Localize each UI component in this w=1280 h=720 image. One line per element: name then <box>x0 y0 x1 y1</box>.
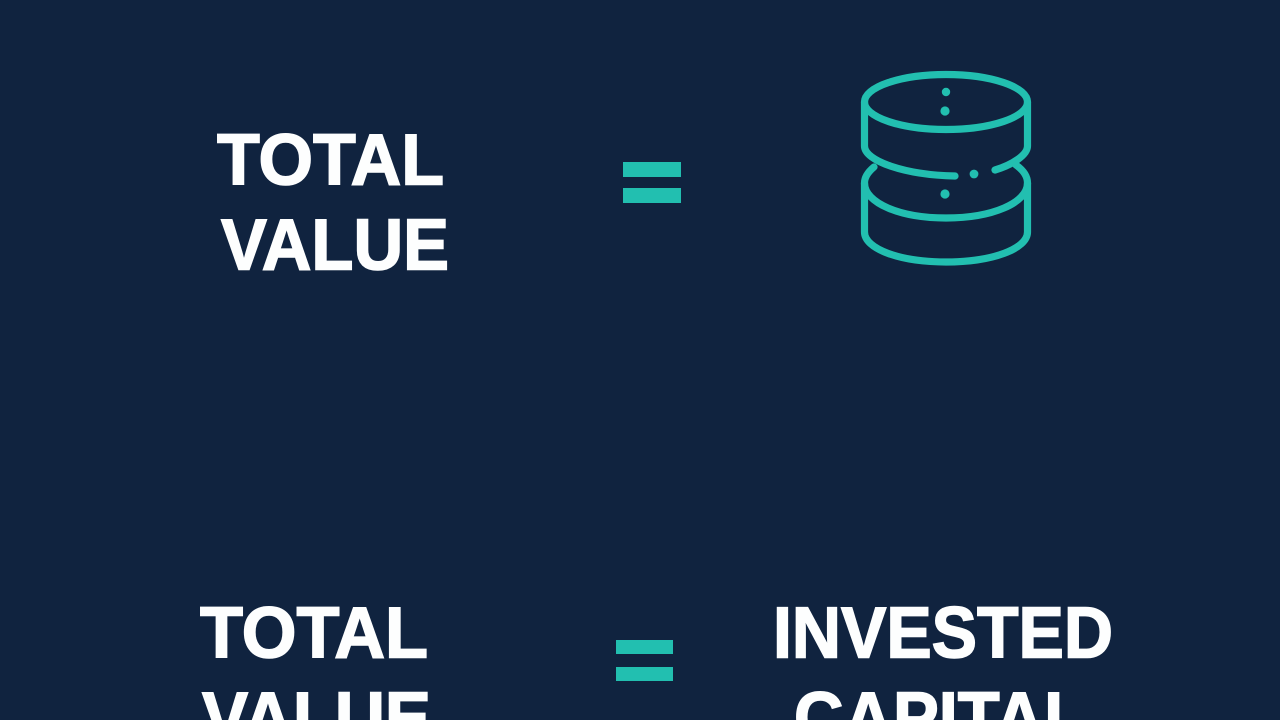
heading: total value (bottom): TOTAL <box>200 593 428 673</box>
heading: total value (bottom) <box>200 606 428 720</box>
infographic canvas <box>200 70 1111 720</box>
icon: equals sign (top) <box>623 162 681 203</box>
heading: total value (top): TOTAL <box>217 120 444 200</box>
icon: equals sign (bottom) <box>616 640 673 681</box>
heading: total value (top) <box>217 120 449 285</box>
heading: invested capital <box>776 606 1111 720</box>
heading: total value (top): VALUE <box>221 205 449 285</box>
heading: invested capital: INVESTED <box>773 593 1113 673</box>
icon: stacked coins <box>864 74 1028 262</box>
